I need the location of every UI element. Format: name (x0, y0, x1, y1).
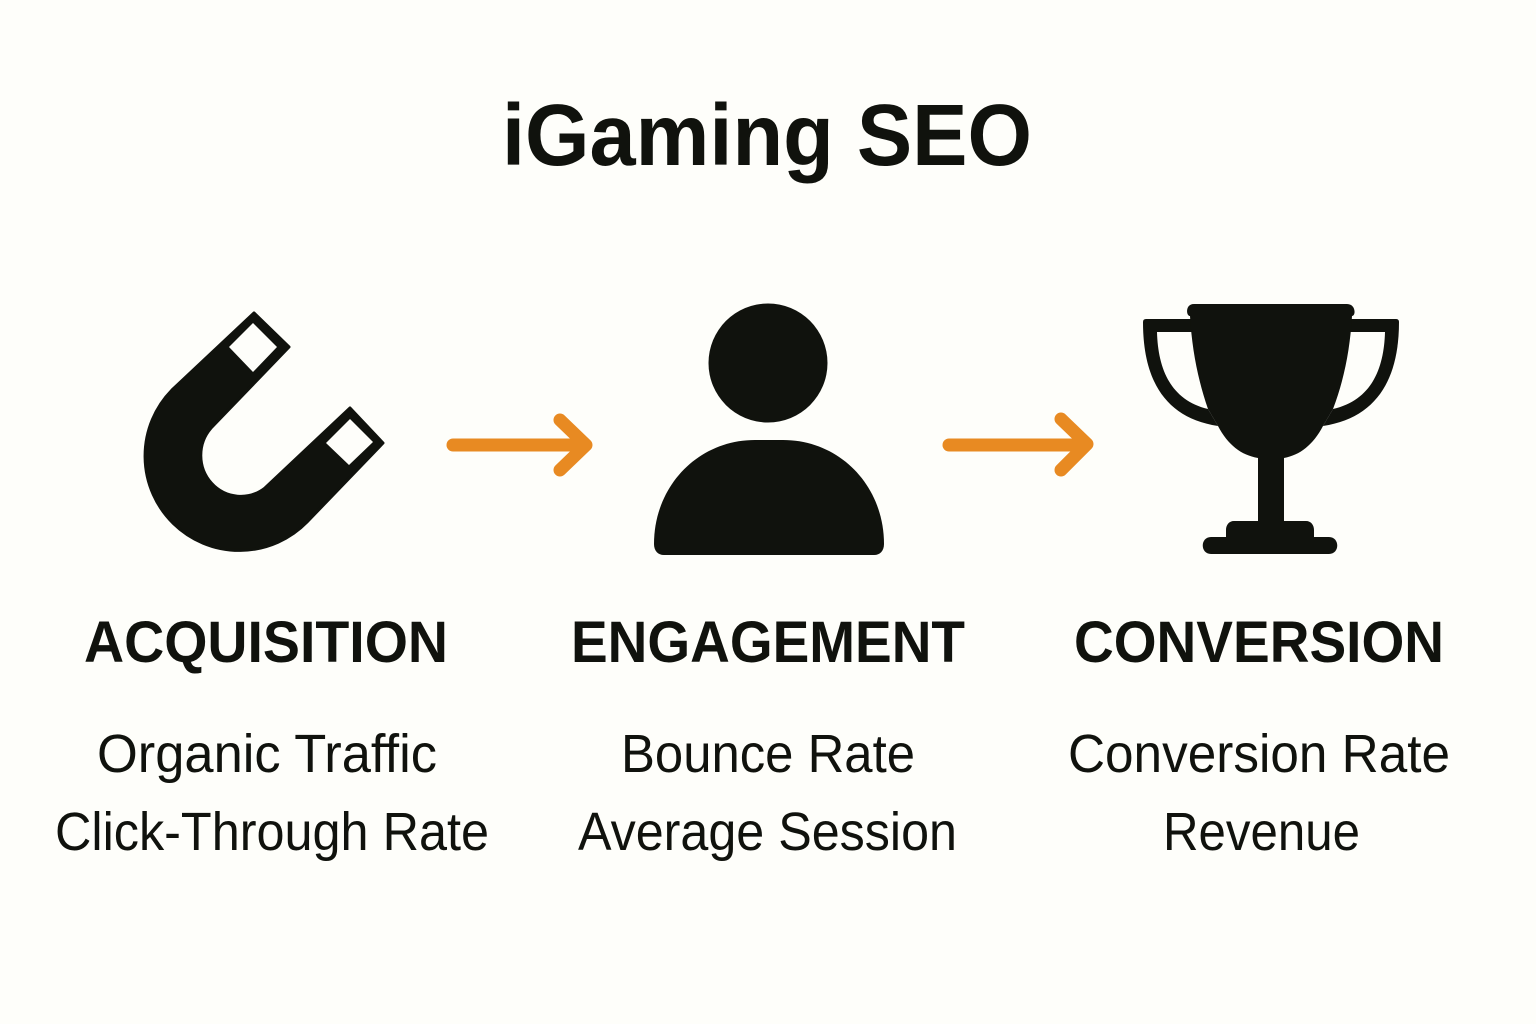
arrow: engagement to conversion (949, 419, 1087, 470)
heading: engagement: ENGAGEMENT (571, 610, 965, 675)
title: iGaming SEO (502, 87, 1032, 184)
metric: average session: Average Session (578, 802, 957, 862)
heading: conversion: CONVERSION (1074, 610, 1444, 675)
metric: conversion rate: Conversion Rate (1068, 724, 1450, 784)
metric: bounce rate: Bounce Rate (621, 724, 915, 784)
metric: revenue: Revenue (1163, 802, 1360, 862)
metric: click-through rate: Click-Through Rate (55, 802, 489, 862)
icon: trophy (1143, 304, 1399, 554)
heading: acquisition: ACQUISITION (84, 610, 448, 675)
arrow: acquisition to engagement (453, 420, 586, 470)
icon: person (654, 304, 884, 555)
icon: magnet (145, 313, 383, 550)
metric: organic traffic: Organic Traffic (97, 724, 437, 784)
